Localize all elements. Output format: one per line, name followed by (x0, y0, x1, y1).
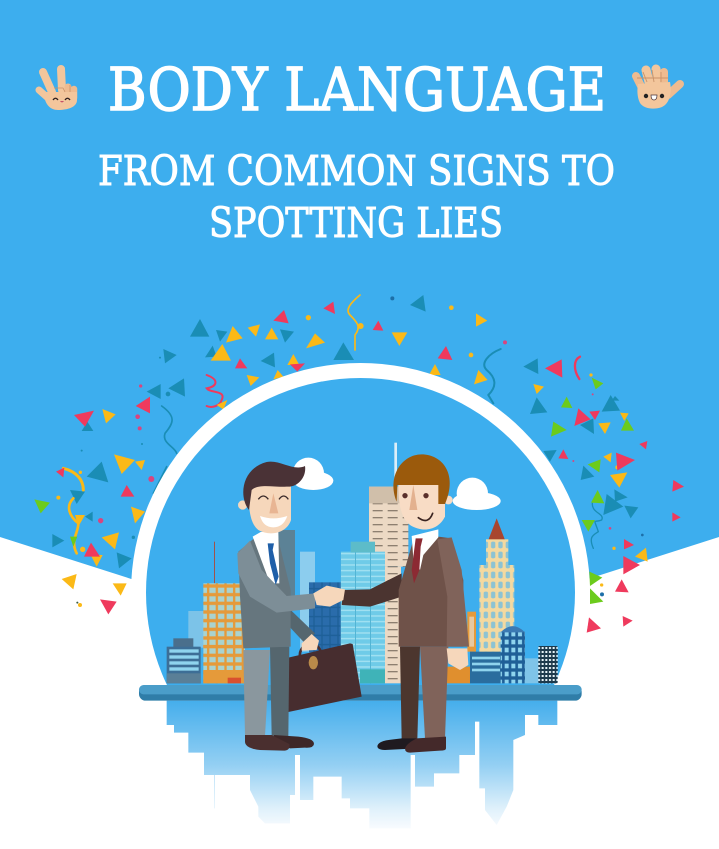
businessman right (342, 454, 469, 753)
scene in zoomed coordinates (139, 443, 582, 828)
city skyline (167, 443, 558, 683)
subtitle: SPOTTING LIES (209, 199, 503, 247)
title: BODY LANGUAGE (108, 55, 606, 124)
confetti: right side (358, 295, 684, 633)
businessman left (237, 462, 319, 751)
handshake (313, 586, 345, 607)
dome ring (131, 363, 590, 685)
confetti: green over ring (589, 572, 603, 604)
clouds (293, 458, 501, 510)
subtitle (98, 147, 615, 247)
icon: open palm hand (636, 69, 680, 109)
confetti: left side (34, 295, 360, 614)
briefcase (288, 643, 362, 712)
subtitle: FROM COMMON SIGNS TO (98, 147, 615, 195)
city reflection (167, 701, 557, 828)
icon: peace sign hand (39, 69, 77, 110)
platform (139, 685, 582, 701)
